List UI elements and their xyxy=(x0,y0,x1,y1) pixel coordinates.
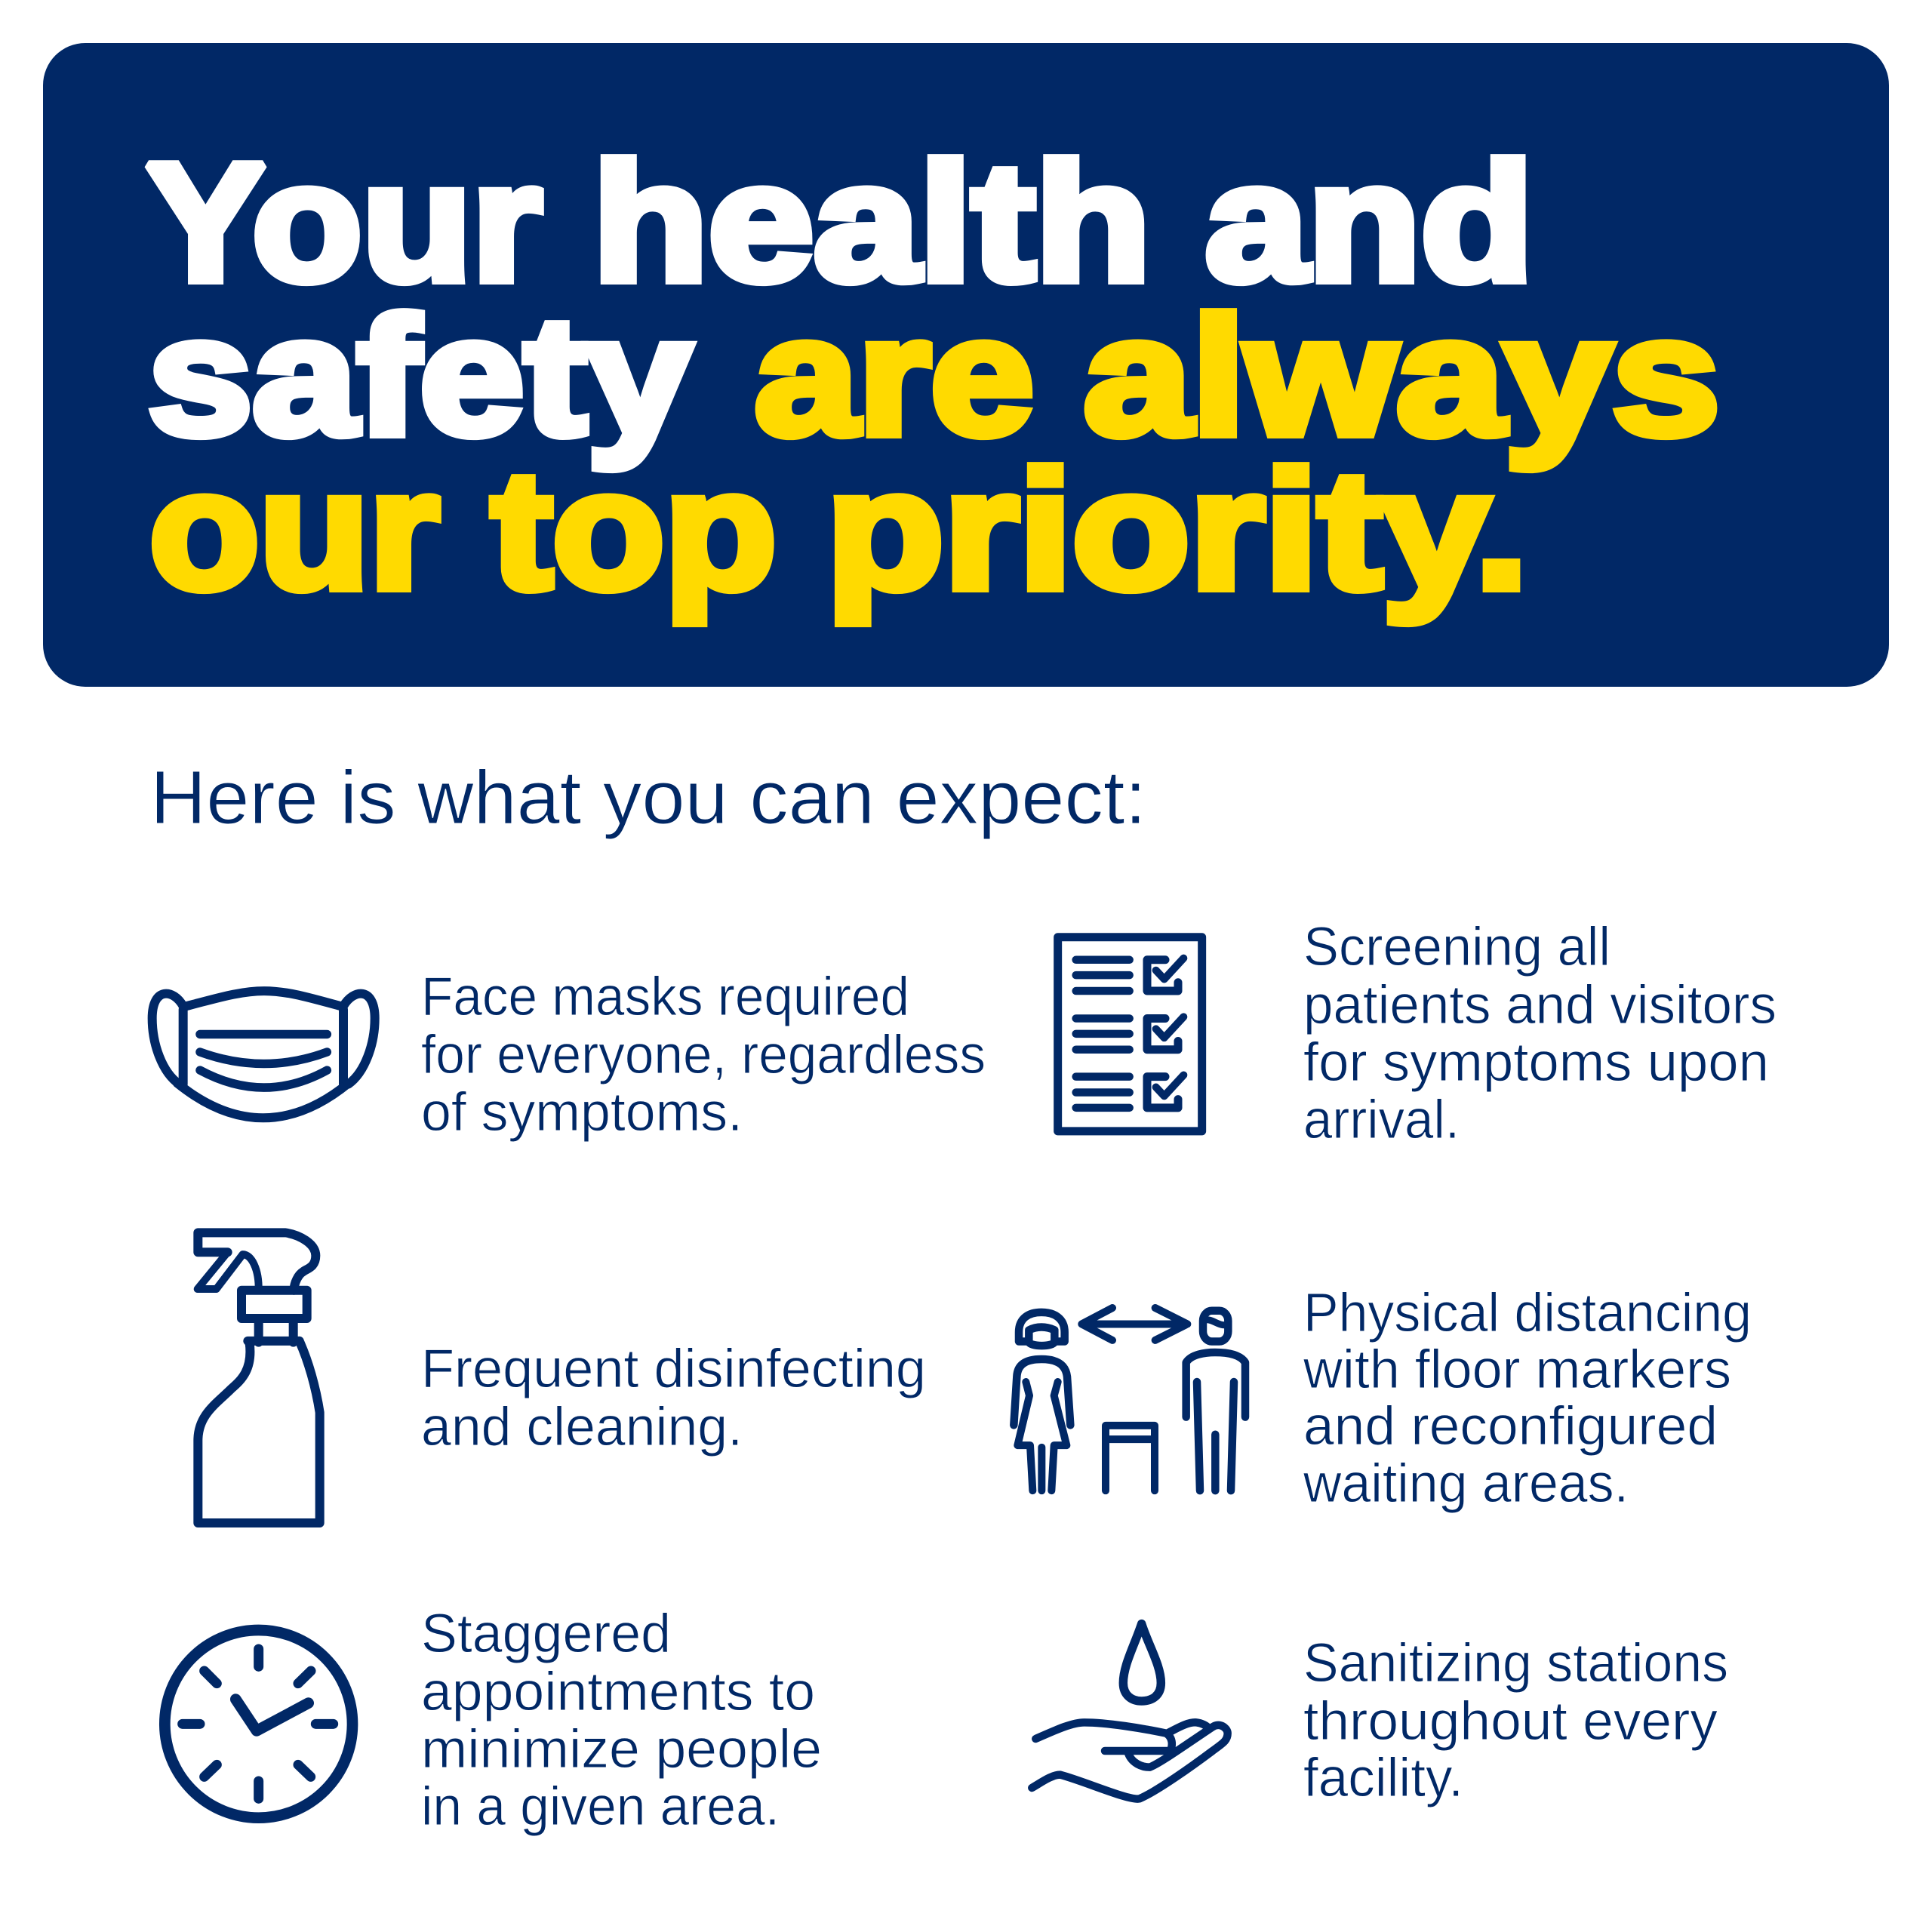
arrow: two-way distance xyxy=(1081,1308,1187,1340)
text: disinfecting: Frequent disinfecting xyxy=(421,1339,926,1399)
title: priority. xyxy=(826,437,1528,624)
text: staggered appointments: in a given area. xyxy=(421,1777,780,1837)
icon: people distancing xyxy=(1014,1308,1245,1491)
item: staggered appointments xyxy=(165,1604,822,1837)
panel: title banner xyxy=(43,43,1889,687)
woman xyxy=(1014,1312,1070,1491)
text: screening: Screening all xyxy=(1303,917,1611,977)
text: screening: arrival. xyxy=(1303,1090,1460,1150)
title: are xyxy=(755,283,1034,470)
text: face masks: of symptoms. xyxy=(421,1082,743,1143)
text: staggered appointments xyxy=(421,1604,822,1837)
text: sanitizing stations xyxy=(1303,1633,1728,1808)
icon: spray bottle xyxy=(198,1232,320,1523)
text: screening: patients and visitors xyxy=(1303,975,1777,1035)
icon: checklist xyxy=(1058,937,1202,1131)
item: face masks xyxy=(152,967,986,1143)
text: sanitizing stations: throughout every xyxy=(1303,1691,1718,1752)
title: and xyxy=(1205,129,1534,316)
title: always xyxy=(1084,283,1720,470)
icon: face mask xyxy=(152,991,375,1118)
title: top xyxy=(491,437,777,624)
text: sanitizing stations: Sanitizing stations xyxy=(1303,1633,1728,1694)
text: face masks: Face masks required xyxy=(421,967,909,1027)
text: staggered appointments: minimize people xyxy=(421,1719,822,1780)
text: disinfecting xyxy=(421,1339,926,1457)
subheading: Here is what you can expect: xyxy=(150,755,1146,840)
title xyxy=(146,129,1720,624)
title: safety xyxy=(148,283,691,470)
text: disinfecting: and cleaning. xyxy=(421,1397,743,1457)
item: sanitizing stations xyxy=(1032,1624,1728,1808)
text: face masks: for everyone, regardless xyxy=(421,1025,986,1085)
floor marker stool xyxy=(1106,1426,1155,1491)
item: disinfecting xyxy=(198,1232,926,1523)
title: Your xyxy=(146,129,542,316)
item: physical distancing xyxy=(1014,1283,1752,1514)
text: physical distancing: and reconfigured xyxy=(1303,1396,1718,1457)
icon: hand with drop xyxy=(1032,1624,1228,1799)
text: staggered appointments: appointments to xyxy=(421,1662,815,1722)
text: screening xyxy=(1303,917,1777,1150)
text: screening: for symptoms upon xyxy=(1303,1032,1769,1093)
title: our xyxy=(149,437,439,624)
text: physical distancing: waiting areas. xyxy=(1303,1454,1629,1514)
text: physical distancing: Physical distancing xyxy=(1303,1283,1752,1343)
text: physical distancing: with floor markers xyxy=(1303,1340,1731,1400)
icon: clock xyxy=(165,1630,352,1818)
man xyxy=(1186,1311,1245,1491)
text: physical distancing xyxy=(1303,1283,1752,1514)
text: face masks xyxy=(421,967,986,1143)
item: screening xyxy=(1058,917,1777,1150)
text: staggered appointments: Staggered xyxy=(421,1604,671,1664)
title: health xyxy=(592,129,1151,316)
text: sanitizing stations: facility. xyxy=(1303,1748,1463,1808)
